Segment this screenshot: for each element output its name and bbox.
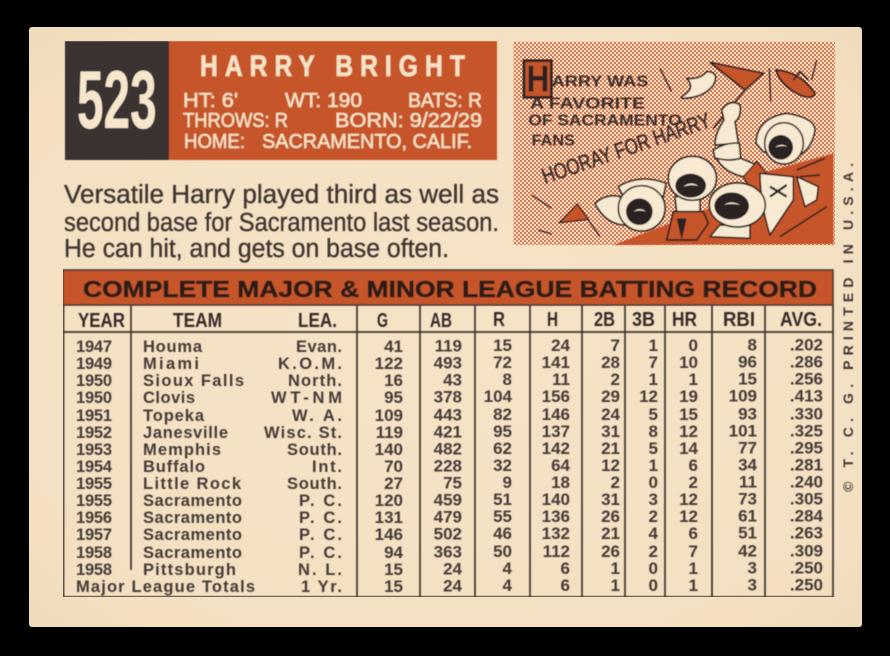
column: 3B: 5 [649, 405, 658, 424]
cheer lettering: HOORAY FOR HARRY [538, 107, 714, 189]
column: team: Major League Totals [76, 578, 255, 596]
column: 3B: 2 [649, 542, 658, 561]
column: H: 156 [542, 387, 570, 406]
column: G: 15 [384, 560, 403, 579]
column: 2B: 12 [601, 456, 620, 475]
table rules [64, 305, 833, 597]
column: R: 32 [493, 456, 512, 475]
column: H: 18 [551, 473, 570, 492]
column: R: 50 [493, 542, 512, 561]
player name: HARRY BRIGHT [200, 49, 465, 83]
cartoon caption: H [527, 58, 549, 100]
column: year: 1950 [76, 389, 112, 407]
column: HR: 12 [679, 490, 698, 509]
column: 3B: 2 [649, 507, 658, 526]
column headings: YEAR [78, 310, 125, 332]
column: RBI: 73 [738, 490, 757, 508]
fan left front [595, 179, 666, 231]
column headings: AB [430, 310, 452, 332]
column: year: 1947 [76, 338, 112, 356]
column: R: 51 [493, 490, 512, 509]
column: R: 55 [493, 507, 512, 526]
column: 2B: 21 [601, 524, 620, 543]
column: 3B: 12 [639, 387, 658, 406]
column: AVG: .284 [790, 506, 824, 526]
cartoon caption: A FAVORITE [530, 95, 645, 112]
column: team: Topeka [143, 407, 205, 425]
fan in cowboy hat [743, 113, 818, 235]
column: league [264, 338, 342, 596]
column: 2B [601, 336, 621, 595]
column: team: Clovis [143, 389, 195, 407]
column: G: 15 [384, 577, 403, 596]
pennant and raised arm [710, 62, 763, 177]
column: R: 95 [493, 422, 512, 441]
column: team: Buffalo [143, 458, 205, 476]
cartoon panel [513, 42, 835, 245]
column: AVG: .256 [790, 370, 823, 388]
column: HR: 14 [679, 439, 699, 458]
column headings: 3B [632, 309, 655, 331]
column: RBI: 93 [738, 404, 757, 424]
column: year: 1956 [76, 509, 112, 527]
card number box: 523 [77, 54, 157, 146]
column: team: Sioux Falls [143, 372, 244, 390]
column: 2B: 29 [601, 387, 620, 406]
column: 3B: 0 [649, 576, 658, 595]
vital statistics: HT: 6' [183, 90, 238, 112]
column: R: 104 [484, 387, 513, 406]
copyright line: © T. C. G. PRINTED IN U.S.A. [840, 163, 856, 492]
vital statistics: BATS: R [408, 90, 482, 112]
column: G: 140 [375, 440, 403, 459]
biography text: Versatile Harry played third as well as [64, 181, 499, 209]
column: 2B: 26 [601, 542, 620, 561]
column: H: 112 [543, 542, 570, 561]
column: G: 146 [375, 525, 403, 544]
column: league: P. C. [299, 544, 342, 562]
column: team: Houma [143, 338, 203, 356]
column: AB [434, 336, 463, 596]
column: AB: 24 [443, 560, 463, 578]
column: AB: 43 [443, 370, 462, 390]
column: G: 120 [375, 491, 403, 510]
column: AB: 479 [434, 508, 462, 526]
column: 3B: 0 [649, 473, 658, 492]
table title banner: COMPLETE MAJOR & MINOR LEAGUE BATTING RECORD [83, 276, 817, 302]
column headings: TEAM [173, 310, 222, 332]
column: 3B: 1 [649, 336, 658, 355]
column: AVG: .240 [790, 472, 823, 492]
card number box [65, 41, 169, 160]
column: RBI: 77 [738, 438, 757, 458]
column: 3B [639, 336, 659, 595]
column: year: 1951 [76, 407, 112, 425]
column: HR [679, 336, 699, 595]
column: R: 46 [493, 524, 512, 543]
column: year [76, 338, 113, 579]
column: G: 119 [376, 423, 403, 442]
cheering fans [595, 113, 827, 240]
column: HR: 6 [689, 524, 698, 543]
column: H [542, 336, 571, 595]
player info panel [169, 41, 497, 160]
column: year: 1952 [76, 424, 112, 442]
column: R: 9 [503, 473, 512, 492]
column: AB: 119 [435, 336, 462, 356]
column: team: Pittsburgh [143, 561, 236, 579]
column: RBI: 51 [738, 524, 757, 542]
column: HR: 7 [689, 542, 698, 561]
column: 2B: 24 [601, 405, 621, 424]
column: team: Little Rock [143, 475, 242, 493]
vital statistics: THROWS: R [183, 110, 288, 132]
column: RBI: 34 [738, 456, 758, 474]
column: RBI [729, 336, 758, 594]
column: team: Sacramento [143, 526, 242, 544]
column: HR: 10 [679, 353, 698, 372]
column headings: G [377, 310, 388, 332]
column: league: K.O.M. [278, 355, 342, 373]
column: team: Sacramento [143, 544, 242, 562]
column: H: 142 [542, 439, 570, 458]
column: team: Memphis [143, 441, 221, 459]
column: AVG: .250 [790, 558, 823, 578]
column: 3B: 4 [649, 524, 659, 543]
column: RBI: 61 [738, 506, 757, 526]
column: H: 146 [542, 405, 570, 424]
column headings: RBI [723, 309, 755, 331]
cartoon caption: FANS [532, 132, 575, 149]
column: HR: 0 [689, 336, 698, 355]
cartoon caption [524, 58, 682, 149]
column: league: N. L. [298, 561, 342, 579]
column: RBI: 109 [729, 386, 757, 406]
column: AVG [790, 336, 824, 594]
column: AVG: .295 [790, 438, 823, 458]
fan right front [709, 183, 765, 238]
biography text [64, 181, 499, 263]
column: HR: 12 [679, 507, 698, 526]
vital statistics: SACRAMENTO, CALIF. [262, 131, 472, 153]
column: AVG: .250 [790, 576, 823, 594]
column: year: 1955 [76, 492, 112, 510]
column: R: 8 [503, 370, 512, 389]
fan center back [667, 156, 716, 240]
column: G: 41 [384, 337, 403, 356]
column: HR: 1 [689, 576, 698, 595]
column: AB: 443 [434, 406, 462, 424]
column headings: H [547, 309, 558, 331]
column: AB: 421 [434, 422, 462, 442]
column: AVG: .305 [790, 490, 823, 508]
column: AVG: .309 [790, 542, 823, 560]
column: R: 4 [503, 576, 513, 595]
column: AB: 493 [434, 354, 462, 372]
column: G: 109 [375, 406, 403, 425]
column: G: 27 [384, 474, 403, 493]
column: league: South. [287, 475, 342, 493]
column: H: 64 [551, 456, 571, 475]
column: 3B: 0 [649, 559, 658, 578]
column: G: 16 [384, 371, 403, 390]
column headings: AVG. [780, 309, 822, 331]
column: G: 131 [375, 508, 403, 527]
vital statistics: HOME: [184, 131, 245, 153]
column: AB: 24 [443, 576, 463, 596]
column: league: Evan. [296, 338, 342, 356]
column: RBI: 101 [729, 422, 757, 440]
column: G: 94 [384, 543, 404, 562]
column: HR: 19 [679, 387, 698, 406]
column: AB: 378 [434, 388, 462, 406]
column: league: North. [288, 372, 342, 390]
biography text: second base for Sacramento last season. [64, 209, 499, 237]
column: 3B: 7 [649, 353, 658, 372]
column: H: 6 [561, 576, 570, 595]
column: G [375, 337, 404, 596]
column: R [484, 336, 513, 595]
column: team: Sacramento [143, 492, 242, 510]
column: 3B: 8 [649, 422, 658, 441]
column: year: 1950 [76, 372, 112, 390]
column: league: 1 Yr. [301, 578, 342, 596]
column: AB: 228 [434, 456, 462, 476]
cartoon halftone background [513, 42, 835, 245]
column: AVG: .330 [790, 404, 823, 424]
vital statistics [183, 90, 482, 153]
column: league: Wisc. St. [264, 424, 342, 442]
vital statistics: BORN: 9/22/29 [335, 110, 482, 132]
column: H: 6 [561, 559, 570, 578]
column: year: 1957 [76, 526, 112, 544]
column: AVG: .325 [790, 422, 823, 440]
column: H: 137 [542, 422, 570, 441]
column: year: 1954 [76, 458, 113, 476]
column: 2B: 1 [611, 576, 620, 595]
column: league: South. [287, 441, 342, 459]
column: H: 141 [542, 353, 570, 372]
column: 2B: 31 [601, 490, 620, 509]
column: 2B: 31 [601, 422, 620, 441]
column: R: 62 [493, 439, 512, 458]
column: 2B: 2 [611, 370, 620, 389]
column: AB: 459 [434, 490, 462, 510]
column: 2B: 7 [611, 336, 620, 355]
column: R: 4 [503, 559, 513, 578]
column: RBI: 3 [748, 576, 757, 594]
column: RBI: 15 [738, 370, 757, 388]
column: R: 82 [493, 405, 512, 424]
column: HR: 6 [689, 456, 698, 475]
column: RBI: 42 [738, 542, 757, 560]
column: 2B: 26 [601, 507, 620, 526]
column: AVG: .202 [790, 336, 823, 354]
column: RBI: 96 [738, 352, 757, 372]
column: league: P. C. [299, 526, 342, 544]
column: RBI: 3 [748, 558, 757, 578]
column: AB: 75 [443, 474, 462, 492]
table title banner [63, 270, 833, 305]
column: league: P. C. [299, 509, 342, 527]
column: 3B: 5 [649, 439, 658, 458]
column: R: 15 [493, 336, 512, 355]
column: G: 122 [375, 354, 403, 373]
column: G: 70 [384, 457, 403, 476]
cartoon caption: ARRY WAS [552, 74, 648, 91]
column: G: 95 [384, 388, 403, 407]
column: AB: 482 [434, 440, 462, 458]
vital statistics: WT: 190 [285, 90, 362, 112]
column headings: 2B [594, 309, 615, 331]
column: RBI: 11 [739, 472, 757, 492]
column: team [76, 338, 255, 596]
column: H: 24 [551, 336, 571, 355]
column: HR: 12 [679, 422, 698, 441]
column: team: Janesville [143, 424, 228, 442]
column: league: WT-NM [271, 389, 342, 407]
column: H: 140 [542, 490, 570, 509]
column: league: P. C. [299, 492, 342, 510]
column: 3B: 1 [649, 370, 658, 389]
column: year: 1958 [76, 544, 112, 562]
column headings: LEA. [298, 310, 337, 332]
column: RBI: 8 [748, 336, 757, 354]
column: year: 1958 [76, 561, 112, 579]
column: AVG: .413 [790, 386, 823, 406]
column: HR: 2 [689, 473, 698, 492]
column: league: Int. [312, 458, 342, 476]
column: 2B: 28 [601, 353, 620, 372]
column: 3B: 3 [649, 490, 658, 509]
column: AVG: .263 [790, 524, 823, 542]
column headings: R [493, 309, 505, 331]
column: H: 136 [542, 507, 570, 526]
column: 2B: 2 [611, 473, 620, 492]
batting record table [63, 270, 833, 597]
column: team: Miami [143, 355, 199, 373]
column: HR: 1 [689, 559, 698, 578]
cartoon caption: OF SACRAMENTO [528, 113, 682, 130]
column: AB: 502 [434, 524, 462, 544]
column: year: 1949 [76, 355, 112, 373]
column: team: Sacramento [143, 509, 242, 527]
column: league: W. A. [292, 407, 342, 425]
column headings: HR [672, 309, 697, 331]
small pennant [559, 204, 588, 223]
column: year: 1953 [76, 441, 112, 459]
column: H: 132 [542, 524, 570, 543]
column headings [78, 309, 822, 332]
biography text: He can hit, and gets on base often. [64, 235, 449, 263]
column: H: 11 [552, 370, 570, 389]
thrown hats [532, 60, 817, 237]
column: R: 72 [493, 353, 512, 372]
column: HR: 15 [679, 405, 698, 424]
column: 2B: 21 [601, 439, 620, 458]
column: 2B: 1 [611, 559, 620, 578]
column: 3B: 1 [649, 456, 658, 475]
column: AVG: .281 [790, 456, 823, 474]
column: year: 1955 [76, 475, 112, 493]
column: AVG: .286 [790, 352, 823, 372]
column: AB: 363 [434, 542, 462, 562]
column: HR: 1 [689, 370, 698, 389]
